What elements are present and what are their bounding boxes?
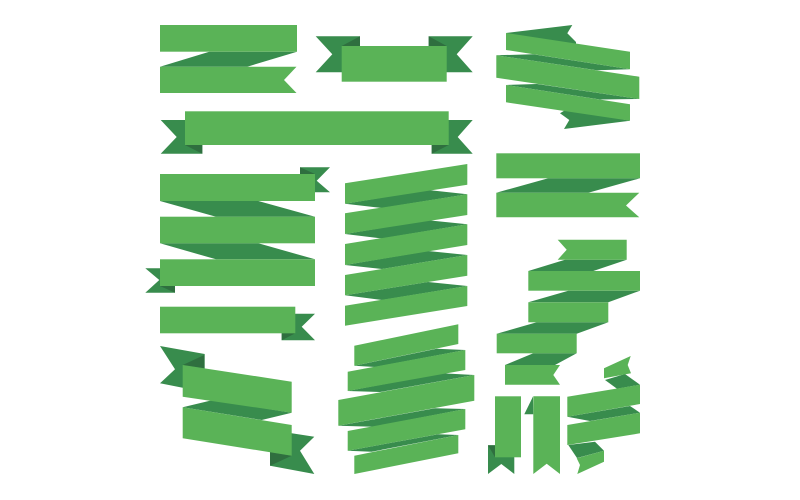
band two (496, 55, 639, 99)
left fold (183, 355, 204, 368)
band three (528, 302, 608, 322)
shadow four (505, 353, 577, 365)
bottom tail fold (160, 286, 175, 293)
right fold (270, 452, 292, 466)
tail fold (488, 445, 495, 457)
bottom tail (577, 451, 604, 474)
left fold (185, 145, 202, 154)
ribbon: short banner with two tails (316, 36, 473, 82)
shadow one (345, 190, 467, 208)
shadow three (345, 251, 467, 269)
shadow three (497, 322, 608, 334)
band three (160, 259, 315, 286)
bottom tail (145, 268, 175, 293)
band two (348, 350, 465, 391)
band (495, 396, 521, 457)
band two (567, 413, 640, 445)
ribbon: vertical bookmark right (524, 396, 560, 474)
fold shadow (496, 178, 640, 193)
tail (488, 445, 514, 474)
ribbon: single band with right tail (160, 307, 315, 340)
shadow two (506, 84, 639, 100)
top tail (506, 25, 576, 46)
band (160, 307, 295, 333)
right fold (432, 145, 449, 154)
band one (183, 365, 292, 413)
band two (345, 194, 467, 234)
band one (506, 33, 630, 69)
band two (528, 271, 640, 291)
band one (567, 385, 640, 417)
left fold (342, 36, 360, 46)
bottom tail (560, 109, 630, 129)
top tail (300, 167, 330, 192)
top shadow (605, 374, 640, 389)
shadow one (528, 260, 627, 271)
band one (345, 164, 467, 204)
top band with notch (558, 240, 627, 260)
shadow one (354, 349, 465, 367)
lower band with notch (160, 67, 296, 93)
ribbon: folded two-band right (496, 153, 640, 217)
band one (354, 324, 458, 366)
band two (183, 407, 292, 456)
shadow four (345, 282, 467, 300)
middle shadow (567, 406, 640, 421)
right tail (270, 433, 314, 474)
tail (282, 314, 315, 340)
lower band with notch (496, 193, 639, 217)
upper band (496, 153, 640, 178)
ribbon: vertical bookmark left (488, 396, 521, 474)
ribbon: long banner with two tails (161, 111, 473, 154)
ribbon: five-band zigzag centre (345, 164, 467, 326)
band five (345, 286, 467, 326)
band four (497, 334, 577, 353)
band with notch (533, 396, 560, 474)
left tail (161, 120, 202, 154)
band one (160, 174, 315, 201)
band three (345, 224, 467, 265)
band five (354, 435, 458, 474)
bottom shadow (568, 442, 604, 458)
fold triangle (524, 396, 533, 414)
right tail (432, 120, 473, 154)
band two (160, 217, 315, 243)
fold shadow (160, 52, 297, 67)
ribbon: slanted three-band top right (496, 25, 639, 129)
top tail (604, 356, 631, 378)
band three (338, 375, 474, 426)
shadow two (345, 220, 467, 238)
ribbon: small wavy bottom right (567, 356, 640, 474)
shadow four (348, 434, 458, 452)
shadow two (160, 243, 315, 259)
ribbon: stair-step five-band right (497, 240, 640, 385)
band three (506, 85, 630, 121)
right tail (429, 36, 473, 72)
shadow two (528, 291, 640, 302)
shadow one (160, 201, 315, 217)
main band (342, 46, 447, 82)
ribbon: five-band stacked bottom centre (338, 324, 474, 474)
main band (185, 111, 449, 145)
tail fold (282, 333, 295, 340)
shadow three (338, 408, 465, 427)
right fold (429, 36, 447, 46)
left tail (160, 346, 205, 388)
bottom band with notch (505, 365, 560, 385)
upper band (160, 25, 297, 52)
ribbon: three-band left with tails (145, 167, 330, 293)
top tail fold (300, 167, 315, 174)
left tail (316, 36, 360, 72)
band four (345, 255, 467, 295)
ribbon: slanted two-band bottom left (160, 346, 314, 474)
ribbon: folded two-band top left (160, 25, 297, 93)
band four (348, 409, 465, 451)
middle shadow (183, 400, 292, 420)
shadow one (496, 54, 630, 70)
shadow two (348, 373, 474, 392)
